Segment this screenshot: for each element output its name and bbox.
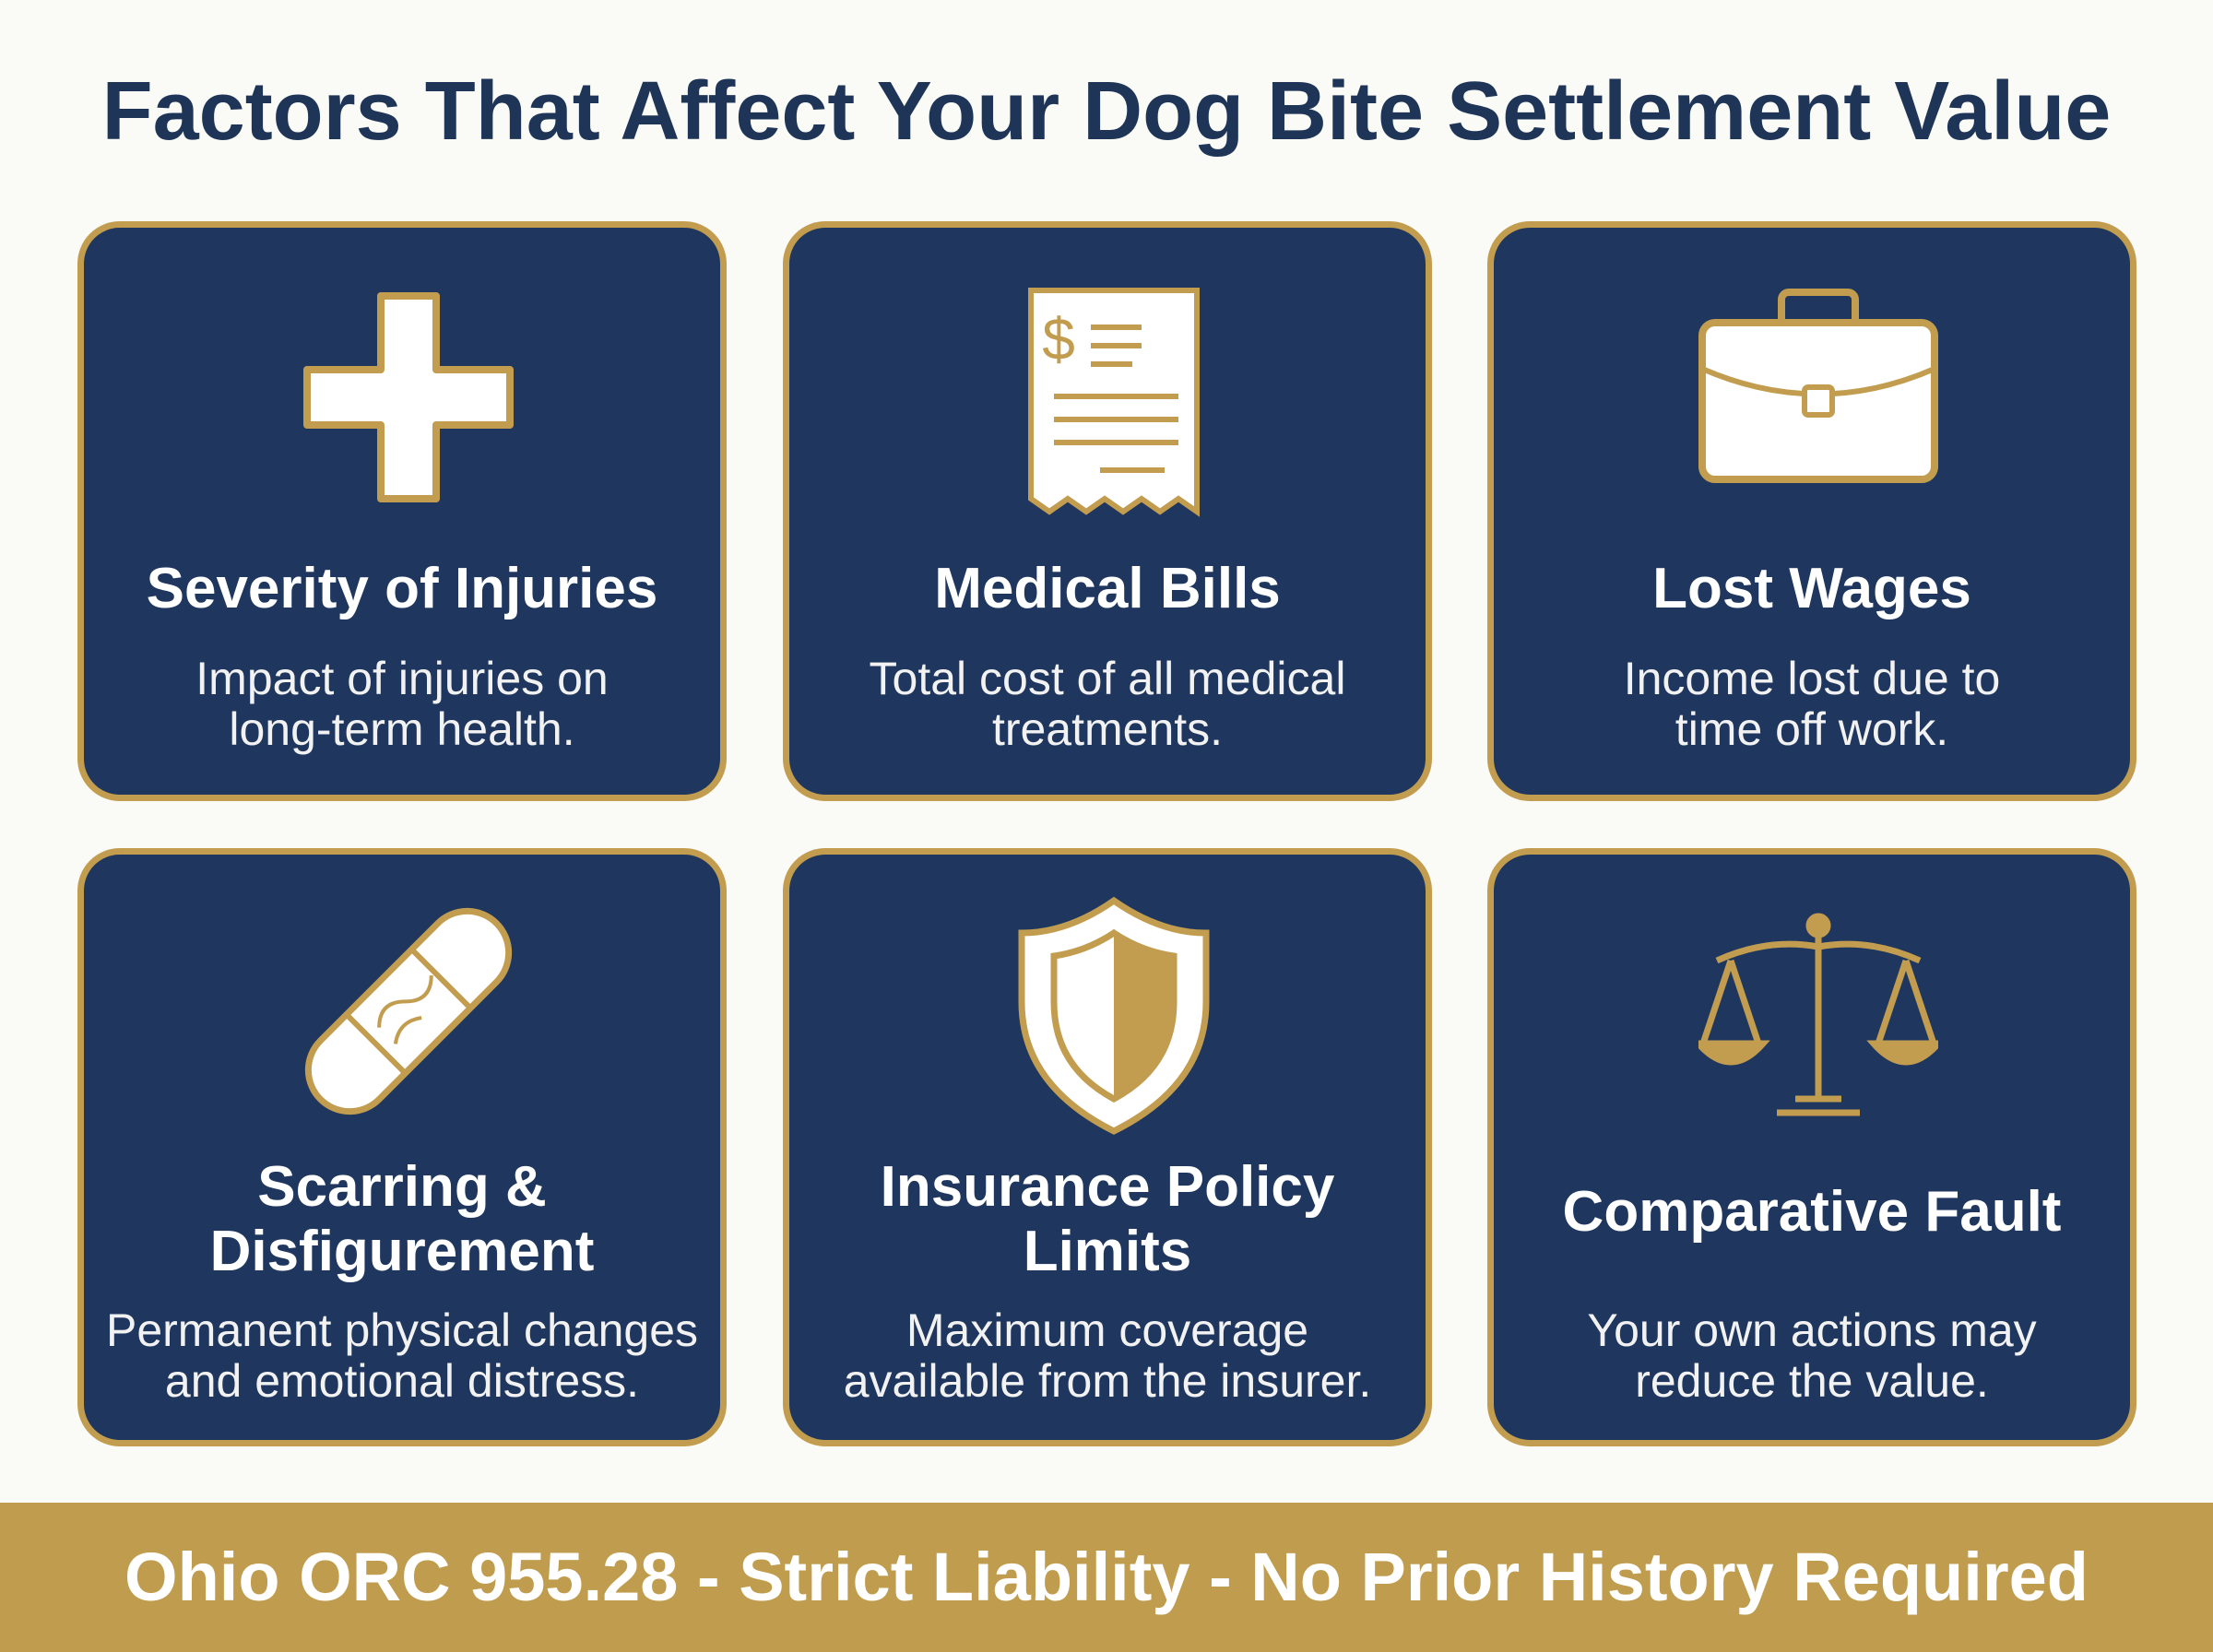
heading: Severity of Injuries <box>147 557 657 620</box>
icon: receipt: $ <box>1042 306 1075 372</box>
title: Factors That Affect Your Dog Bite Settlement Value <box>102 65 2111 158</box>
heading: Medical Bills <box>934 557 1281 620</box>
panel: comparative fault <box>1487 848 2136 1446</box>
description: time off work. <box>1675 703 1948 755</box>
heading: Scarring & <box>257 1155 547 1219</box>
description <box>195 653 609 755</box>
icon: shield <box>1018 896 1210 1135</box>
icon: medical cross <box>303 292 514 502</box>
description: Total cost of all medical <box>870 653 1345 704</box>
panel: insurance limits <box>783 848 1432 1446</box>
icon: receipt <box>1028 288 1200 517</box>
description: Impact of injuries on <box>195 653 609 704</box>
panel: scarring <box>77 848 727 1446</box>
heading: Insurance Policy <box>881 1155 1334 1219</box>
heading <box>881 1155 1334 1283</box>
description: Income lost due to <box>1624 653 2000 704</box>
description: Permanent physical changes <box>106 1304 698 1356</box>
heading: Lost Wages <box>1652 557 1971 620</box>
description <box>870 653 1345 755</box>
description: Maximum coverage <box>906 1304 1308 1356</box>
description: Your own actions may <box>1587 1304 2037 1356</box>
description: and emotional distress. <box>165 1355 639 1407</box>
description <box>1624 653 2000 755</box>
icon: briefcase <box>1698 289 1938 483</box>
description <box>844 1304 1371 1407</box>
heading: Limits <box>1024 1220 1191 1283</box>
panel: medical bills <box>783 221 1432 801</box>
icon: bandage <box>304 907 513 1115</box>
panel: lost wages <box>1487 221 2136 801</box>
banner <box>0 1503 2213 1652</box>
banner: Ohio ORC 955.28 - Strict Liability - No Prior History Required <box>124 1539 2089 1615</box>
description <box>106 1304 698 1407</box>
heading <box>210 1155 594 1283</box>
description: treatments. <box>992 703 1223 755</box>
description: reduce the value. <box>1635 1355 1989 1407</box>
description <box>1587 1304 2037 1407</box>
panel: severity of injuries <box>77 221 727 801</box>
heading: Disfigurement <box>210 1220 594 1283</box>
description: available from the insurer. <box>844 1355 1371 1407</box>
heading: Comparative Fault <box>1563 1180 2061 1244</box>
description: long-term health. <box>229 703 575 755</box>
icon: scales <box>1698 913 1938 1115</box>
